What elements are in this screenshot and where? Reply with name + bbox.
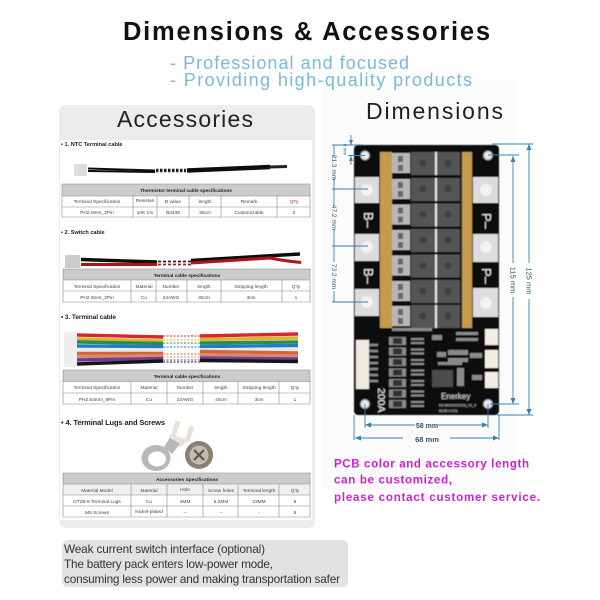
customization note: can be customized, xyxy=(334,474,452,486)
dimension labels: 5 mm xyxy=(342,144,348,155)
section 1: NTC terminal cable: PH2.0mm_2Pin xyxy=(80,210,114,216)
callout: switch interface note: Weak current switch interface (optional) xyxy=(64,542,265,556)
subtitle: - Providing high-quality products xyxy=(170,70,472,90)
section 4: terminal lugs and screws: • 4. Terminal Lugs and Screws xyxy=(61,418,165,427)
control components xyxy=(392,328,482,387)
section 2: switch cable: PH2.0mm_2Pin xyxy=(80,295,114,301)
dimension labels: 47.2 mm xyxy=(330,205,337,230)
brand label xyxy=(439,392,476,413)
title: Dimensions & Accessories xyxy=(123,18,490,46)
section 1: NTC terminal cable: Remark xyxy=(241,199,258,205)
side connectors xyxy=(485,329,498,388)
section 1: NTC terminal cable: Resistan xyxy=(136,198,155,204)
section 3: terminal cable: Terminal cable specifications xyxy=(154,374,221,380)
dimension labels: 125 mm xyxy=(524,267,534,295)
section 2: switch cable: Cu xyxy=(141,295,147,301)
section 4: terminal lugs and screws: Terminal length xyxy=(243,488,276,494)
section 3: terminal cable: 1 xyxy=(294,397,297,403)
section 1: NTC terminal cable: QTy xyxy=(290,199,299,205)
section 4: terminal lugs and screws: 5.2MM xyxy=(214,499,228,505)
section 4: terminal lugs and screws: Nickel-plated xyxy=(135,509,163,515)
heading: dimensions: Dimensions xyxy=(366,98,503,124)
balance resistors xyxy=(389,337,424,408)
section 1: NTC terminal cable: B value xyxy=(165,199,181,205)
section 3: terminal cable: 3cm xyxy=(254,397,264,403)
background panel: dimensions xyxy=(322,80,515,490)
terminal labels: P– xyxy=(479,213,494,230)
section 2: switch cable: Number xyxy=(162,284,180,290)
section 2: switch cable: Stripping length xyxy=(234,284,268,290)
section 4: terminal lugs and screws: Material Model xyxy=(81,488,113,494)
brand label: EK-BMS0002006_V1_0 xyxy=(439,404,476,408)
terminal labels: P– xyxy=(479,268,494,285)
section 3: terminal cable: • 3. Terminal cable xyxy=(61,314,116,321)
section 1: NTC terminal cable: Customizable xyxy=(234,210,264,216)
dimension labels xyxy=(330,144,534,444)
section 4: terminal lugs and screws xyxy=(61,418,310,517)
callout: switch interface note: consuming less power and making transportation safer xyxy=(64,572,340,586)
section 4: terminal lugs and screws: - xyxy=(258,511,260,516)
B and P terminal pads xyxy=(355,177,498,317)
section 2: switch cable: 1 xyxy=(295,295,298,301)
section 4: terminal lugs and screws: -- xyxy=(219,511,223,516)
section 3: terminal cable: Q'ty xyxy=(291,385,300,391)
heading: accessories: Accessories xyxy=(117,106,253,132)
section 3: terminal cable: 40cm xyxy=(215,397,227,403)
terminal labels: B– xyxy=(361,212,376,229)
MOSFET rows xyxy=(392,152,460,328)
callout: switch interface note xyxy=(62,540,348,587)
section 4: terminal lugs and screws: Hole xyxy=(180,487,190,493)
section 3: terminal cable: 22AWG xyxy=(177,397,194,403)
section 2: switch cable: Terminal Specification xyxy=(74,284,121,290)
section 3: terminal cable: PH2.54mm_9Pin xyxy=(79,397,115,403)
section 4: terminal lugs and screws: Screw holes xyxy=(208,488,235,494)
section 2: switch cable: length xyxy=(197,284,211,290)
section 1: NTC terminal cable: B3435 xyxy=(166,210,180,216)
PCB board xyxy=(354,145,499,415)
section 4: terminal lugs and screws: 6 xyxy=(294,499,297,505)
dimension labels: 58 mm xyxy=(416,423,438,430)
dimension labels: 21.3 mm xyxy=(330,155,337,180)
section 4: terminal lugs and screws: 4MM xyxy=(180,499,190,505)
section 4: terminal lugs and screws: Q'ty xyxy=(291,488,300,494)
section 2: switch cable: 30cm xyxy=(198,295,210,301)
section 4: terminal lugs and screws: M5 Screws xyxy=(85,510,109,516)
section 4: terminal lugs and screws: OTZ6-5 Terminal Lugs xyxy=(73,499,121,505)
section 2: switch cable: Q'ty xyxy=(292,284,301,290)
customization note: PCB color and accessory length xyxy=(334,458,529,470)
section 3: terminal cable: Stripping length xyxy=(242,385,276,391)
mounting holes xyxy=(360,151,492,408)
section 3: terminal cable: Number xyxy=(176,385,194,391)
subtitle: - Professional and focused xyxy=(170,53,409,73)
section 1: NTC terminal cable: 10K 1% xyxy=(137,210,154,216)
section 1: NTC terminal cable: Terminal Specification xyxy=(74,199,121,205)
section 4: terminal lugs and screws: Cu xyxy=(146,499,152,505)
section 2: switch cable: Terminal cable specifications xyxy=(154,273,221,279)
section 1: NTC terminal cable: Thermistor terminal cable specifications xyxy=(140,188,232,194)
section 3: terminal cable: Terminal Specification xyxy=(74,385,121,391)
brand label: B128 LI/12s xyxy=(439,409,458,413)
section 2: switch cable: 3cm xyxy=(246,295,256,301)
section 1: NTC terminal cable: • 1. NTC Terminal cable xyxy=(61,142,123,148)
customization note: please contact customer service. xyxy=(334,492,540,504)
brand label: Enerkey xyxy=(441,392,470,401)
dimension lines xyxy=(330,135,534,444)
callout: switch interface note: The battery pack enters low-power mode, xyxy=(64,557,273,571)
section 4: terminal lugs and screws: Material xyxy=(140,488,158,494)
section 3: terminal cable xyxy=(61,314,310,404)
section 4: terminal lugs and screws: Accessories Specifications xyxy=(156,477,218,483)
copper bus bars xyxy=(380,152,472,328)
section 3: terminal cable: Material xyxy=(140,385,158,391)
section 2: switch cable: 24AWG xyxy=(163,295,180,301)
section 4: terminal lugs and screws: 23MM xyxy=(252,499,266,505)
section 4: terminal lugs and screws: -- xyxy=(183,511,187,516)
section 4: terminal lugs and screws: 6 xyxy=(294,510,297,516)
rating label: 200A xyxy=(375,388,387,413)
section 1: NTC terminal cable: length xyxy=(198,199,212,205)
section 3: terminal cable: Cu xyxy=(146,397,152,403)
section 2: switch cable: Material xyxy=(135,284,153,290)
customization note xyxy=(334,458,540,504)
dimension labels: 115 mm xyxy=(508,267,518,293)
dimension labels: 68 mm xyxy=(415,435,439,444)
section 1: NTC terminal cable: 30cm xyxy=(199,210,211,216)
subtitle xyxy=(170,53,472,90)
terminal labels xyxy=(361,212,494,285)
dimension labels: 73.2 mm xyxy=(330,264,337,289)
section 2: switch cable: • 2. Switch cable xyxy=(61,230,105,236)
section 2: switch cable xyxy=(61,230,310,302)
section 1: NTC terminal cable xyxy=(61,142,310,217)
section 3: terminal cable: length xyxy=(214,385,228,391)
balance connector xyxy=(356,340,378,389)
terminal labels: B– xyxy=(361,268,376,285)
section 1: NTC terminal cable: 2 xyxy=(293,210,296,216)
panel: accessories xyxy=(59,105,315,528)
